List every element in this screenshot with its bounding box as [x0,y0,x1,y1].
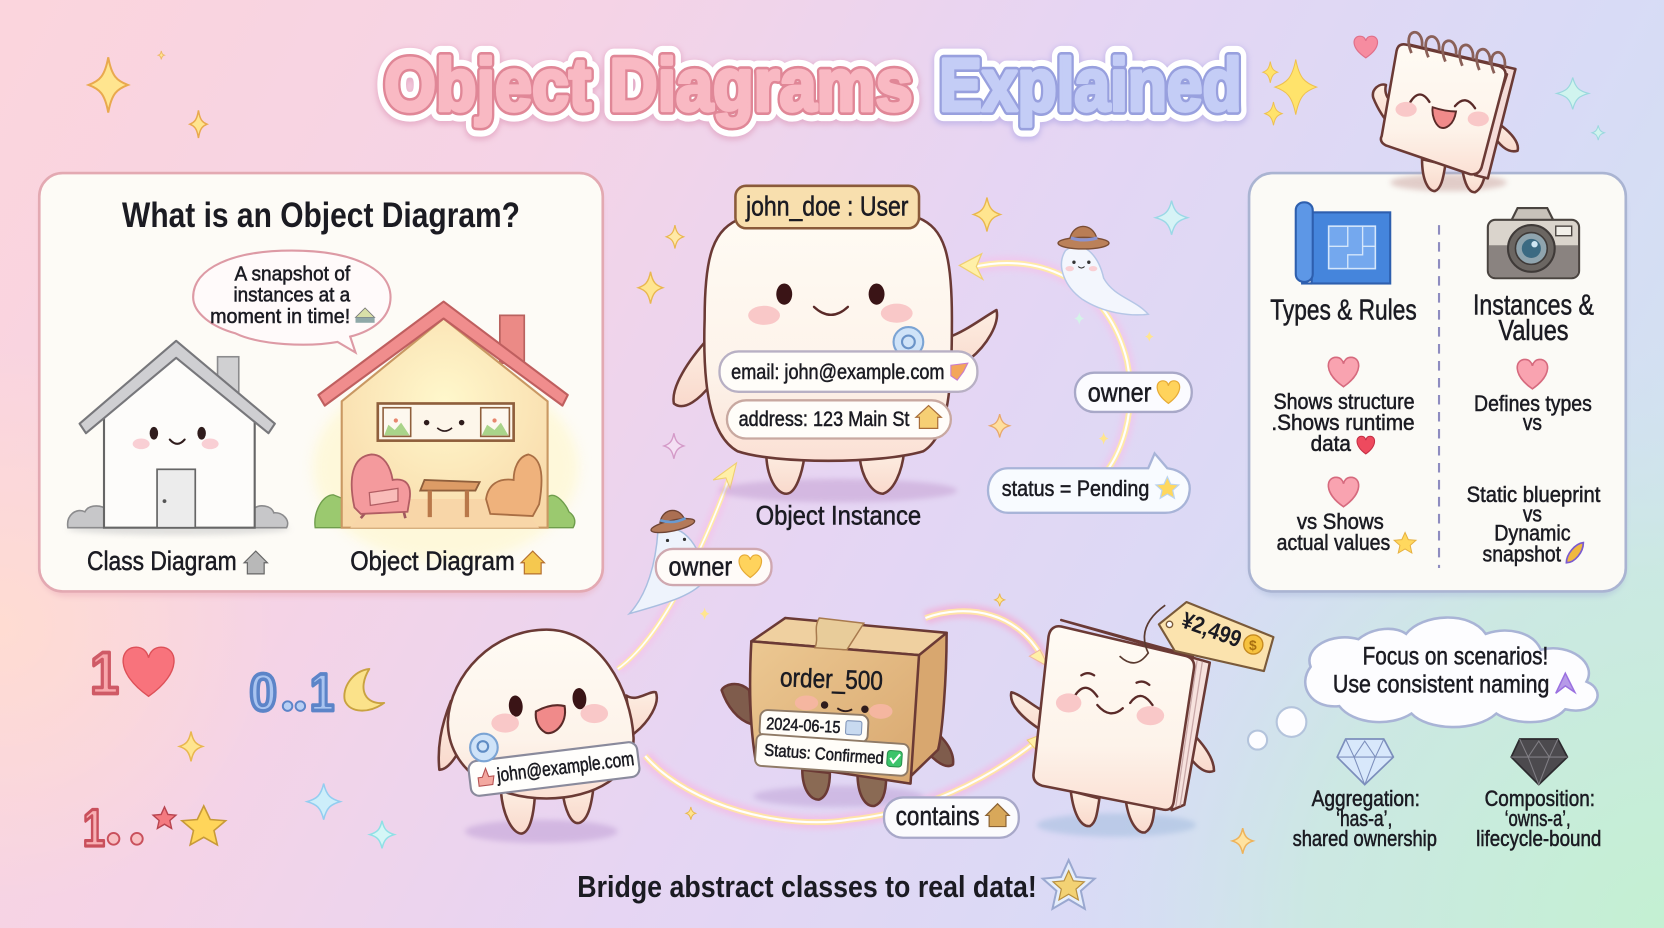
ghost with hat (top) [1058,226,1148,315]
panel: what is an object diagram [39,173,603,597]
arms [673,310,997,406]
text: static vs dynamic: snapshot [1483,542,1562,567]
thought cloud: focus on scenarios: Use consistent naming [1333,670,1549,698]
icon: camera [1488,208,1579,278]
search badge [470,734,498,761]
multiplicity: 0..1 moon: 0 [249,663,277,722]
ghost with hat (lower) [629,510,706,614]
price tag [1120,602,1273,671]
text: static vs dynamic: Dynamic [1494,520,1571,545]
label: class diagram: Class Diagram [87,546,237,576]
multiplicity: 1 heart: 1 [90,639,119,706]
icon: heart [1354,36,1378,58]
icon: blueprint [1296,202,1390,283]
email pill [720,351,977,392]
face [748,283,913,325]
relationship arcs [618,254,1130,822]
character: order box: order_500 [780,662,883,696]
heading: instances and values: Instances & [1473,289,1594,321]
text: shows structure: Shows structure [1273,389,1415,414]
multiplicity: 1..* star [83,799,226,858]
text: static vs dynamic: Static blueprint [1467,482,1601,507]
status tag [755,734,909,776]
thought cloud: focus on scenarios: Focus on scenarios! [1363,643,1548,671]
email tag [468,741,640,797]
title: Explained [939,43,1242,126]
title: Object Diagrams [384,43,913,126]
text: static vs dynamic: vs [1523,501,1542,526]
text: composition [1476,786,1601,851]
title: Explained [939,43,1242,126]
decorative sparkles [89,51,1604,854]
text: aggregation: shared ownership [1293,826,1437,851]
spiral rings [1409,32,1505,73]
text: shows structure [1271,389,1415,456]
contains pill: contains [896,801,980,831]
character: round user [439,630,657,843]
text: aggregation: Aggregation: [1312,786,1420,811]
search badge [894,327,923,357]
text: shows actual values: vs Shows [1297,509,1384,534]
title: Explained [939,46,1242,129]
multiplicity: 0..1 moon [249,663,384,722]
status bubble: status = Pending [1002,476,1149,501]
character: book with price tag [1011,602,1273,837]
speech bubble: snapshot [193,251,391,353]
heading: instances and values [1473,289,1594,347]
date tag: 2024-06-15 [766,714,841,737]
icon: heart [1328,357,1359,387]
text: aggregation: ‘has-a’, [1336,806,1392,831]
panel: class vs object comparison [1249,173,1626,597]
heading: types and rules: Types & Rules [1270,295,1417,327]
multiplicity: 1..* star: 1 [83,799,105,858]
title [384,43,1242,129]
speech bubble: snapshot: A snapshot of [235,262,350,285]
class diagram house [67,341,290,535]
speech bubble: snapshot: moment in time! [210,305,350,328]
text: aggregation [1293,786,1437,851]
owner pill (left) [656,549,772,585]
address pill [727,400,951,439]
status tag: Status: Confirmed [764,741,885,768]
address pill: address: 123 Main St [739,408,910,431]
title: Object Diagrams [384,46,913,129]
legs [766,451,904,494]
title: Object Diagrams [384,43,913,126]
label: object diagram: Object Diagram [350,546,515,576]
icon: mini house [356,308,375,323]
owner pill (right) [1075,373,1192,412]
price tag: ¥2,499 [1178,607,1245,652]
icon: star badge [1043,860,1095,909]
thought cloud: focus on scenarios [1248,618,1598,750]
status bubble [988,453,1190,513]
owner pill (left): owner [669,551,732,581]
icon: umbrella [1556,673,1575,693]
name tag [735,186,919,228]
aggregation diamond [1293,739,1437,851]
text: defines types: vs [1523,410,1542,435]
footer: bridge abstract classes: Bridge abstract classes to real data! [577,869,1037,904]
email tag: john@example.com [495,748,635,787]
text: shows actual values: actual values [1277,530,1390,555]
heading: what is an object diagram: What is an Object Diagram? [122,196,520,235]
text: defines types [1474,391,1592,435]
text: shows structure: .Shows runtime [1271,410,1415,435]
speech bubble: snapshot: instances at a [233,284,351,307]
multiplicity: 1 heart [90,639,174,706]
text: composition: lifecycle-bound [1476,826,1601,851]
multiplicity: 0..1 moon: 1 [310,663,334,722]
text: composition: ‘owns-a’, [1505,806,1571,831]
title: Explained [939,43,1242,126]
text: composition: Composition: [1485,786,1595,811]
text: shows structure: data [1311,431,1351,456]
character: order box [722,618,953,807]
text: shows actual values [1277,509,1416,555]
price tag: $ [1249,638,1257,653]
title: Object Diagrams [384,43,913,126]
label: object instance: Object Instance [756,501,921,531]
name tag: john_doe : User [745,191,908,222]
body [704,212,952,461]
heading: instances and values: Values [1498,315,1568,347]
email pill: email: john@example.com [731,361,944,384]
composition diamond [1476,739,1601,851]
character: notebook [1354,32,1518,192]
icon: heart [1328,477,1359,507]
object diagram house [313,302,578,563]
icon: heart [1517,359,1548,389]
text: defines types: Defines types [1474,391,1592,416]
contains pill [884,797,1019,838]
character: object instance john_doe [673,186,997,502]
date tag [759,710,869,743]
owner pill (right): owner [1088,377,1152,407]
text: static vs dynamic [1467,482,1601,567]
